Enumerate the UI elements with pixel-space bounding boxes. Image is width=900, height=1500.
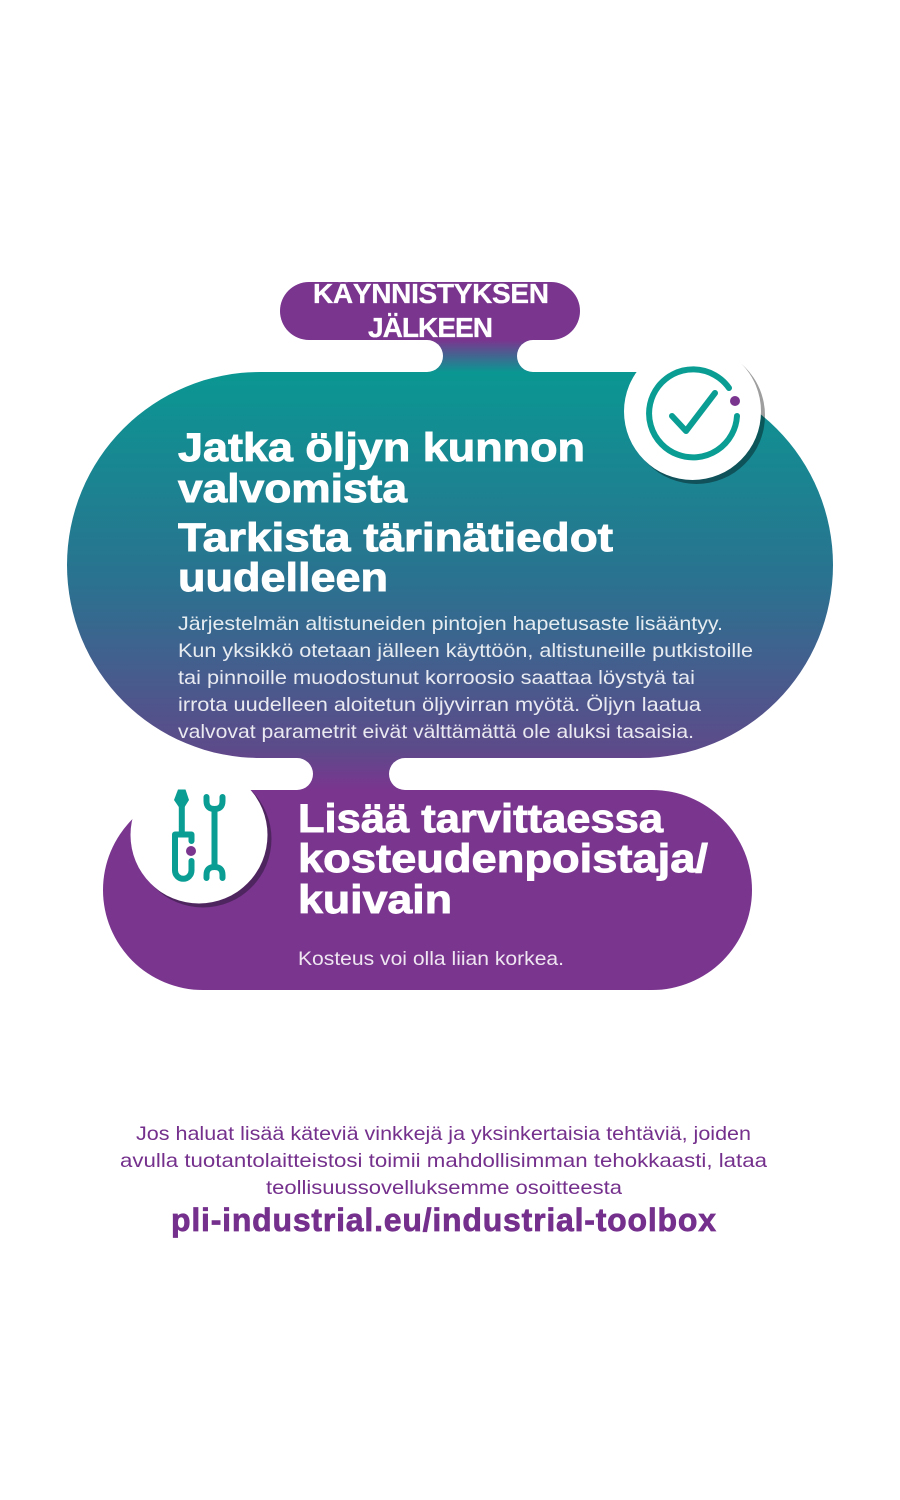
heading: add dehumidifier: Lisää tarvittaessa [298, 797, 664, 841]
heading: add dehumidifier: kuivain [298, 878, 452, 922]
pill background [103, 790, 752, 990]
heading: main actions: uudelleen [178, 556, 388, 600]
panel: main gradient pill [67, 343, 833, 792]
text: body paragraph: irrota uudelleen aloitetun öljyvirran myötä. Öljyn laatua [178, 694, 701, 716]
heading: main actions: valvomista [178, 467, 408, 511]
text: body paragraph: tai pinnoille muodostunut korroosio saattaa löystyä tai [178, 667, 695, 689]
text: footer note: avulla tuotantolaitteistosi toimii mahdollisimman tehokkaasti, lataa [120, 1150, 767, 1172]
heading: main actions: Jatka öljyn kunnon [178, 426, 585, 470]
connector: lower neck [250, 750, 452, 792]
text: footer note: Jos haluat lisää käteviä vinkkejä ja yksinkertaisia tehtäviä, joiden [136, 1123, 751, 1145]
text: body paragraph [178, 613, 753, 743]
heading: pill label: KÄYNNISTYKSEN [313, 278, 549, 309]
heading: pill label [314, 282, 548, 338]
link: toolbox url: pli-industrial.eu/industrial-toolbox [171, 1202, 716, 1238]
text: footer note [120, 1123, 767, 1199]
heading: add dehumidifier: kosteudenpoistaja/ [298, 837, 708, 881]
heading: main actions: Tarkista tärinätiedot [178, 516, 613, 560]
heading: pill label: JÄLKEEN [368, 312, 493, 343]
connector: top neck [395, 338, 565, 374]
text: body paragraph: Järjestelmän altistuneiden pintojen hapetusaste lisääntyy. [178, 613, 723, 635]
pill background [280, 282, 580, 340]
icon: tools badge [100, 758, 272, 908]
pill background [67, 372, 833, 758]
panel: lower purple pill [100, 758, 752, 990]
text: moisture note: Kosteus voi olla liian korkea. [298, 948, 564, 970]
infographic canvas [67, 282, 833, 1238]
heading: add dehumidifier [298, 797, 708, 922]
heading: main actions [178, 426, 613, 600]
panel: top label pill [280, 278, 580, 374]
icon: check badge [624, 343, 765, 484]
text: footer note: teollisuussovelluksemme osoitteesta [266, 1177, 622, 1199]
footer: call to action [120, 1123, 767, 1238]
text: body paragraph: valvovat parametrit eivät välttämättä ole aluksi tasaisia. [178, 721, 694, 743]
text: body paragraph: Kun yksikkö otetaan jälleen käyttöön, altistuneille putkistoille [178, 640, 753, 662]
